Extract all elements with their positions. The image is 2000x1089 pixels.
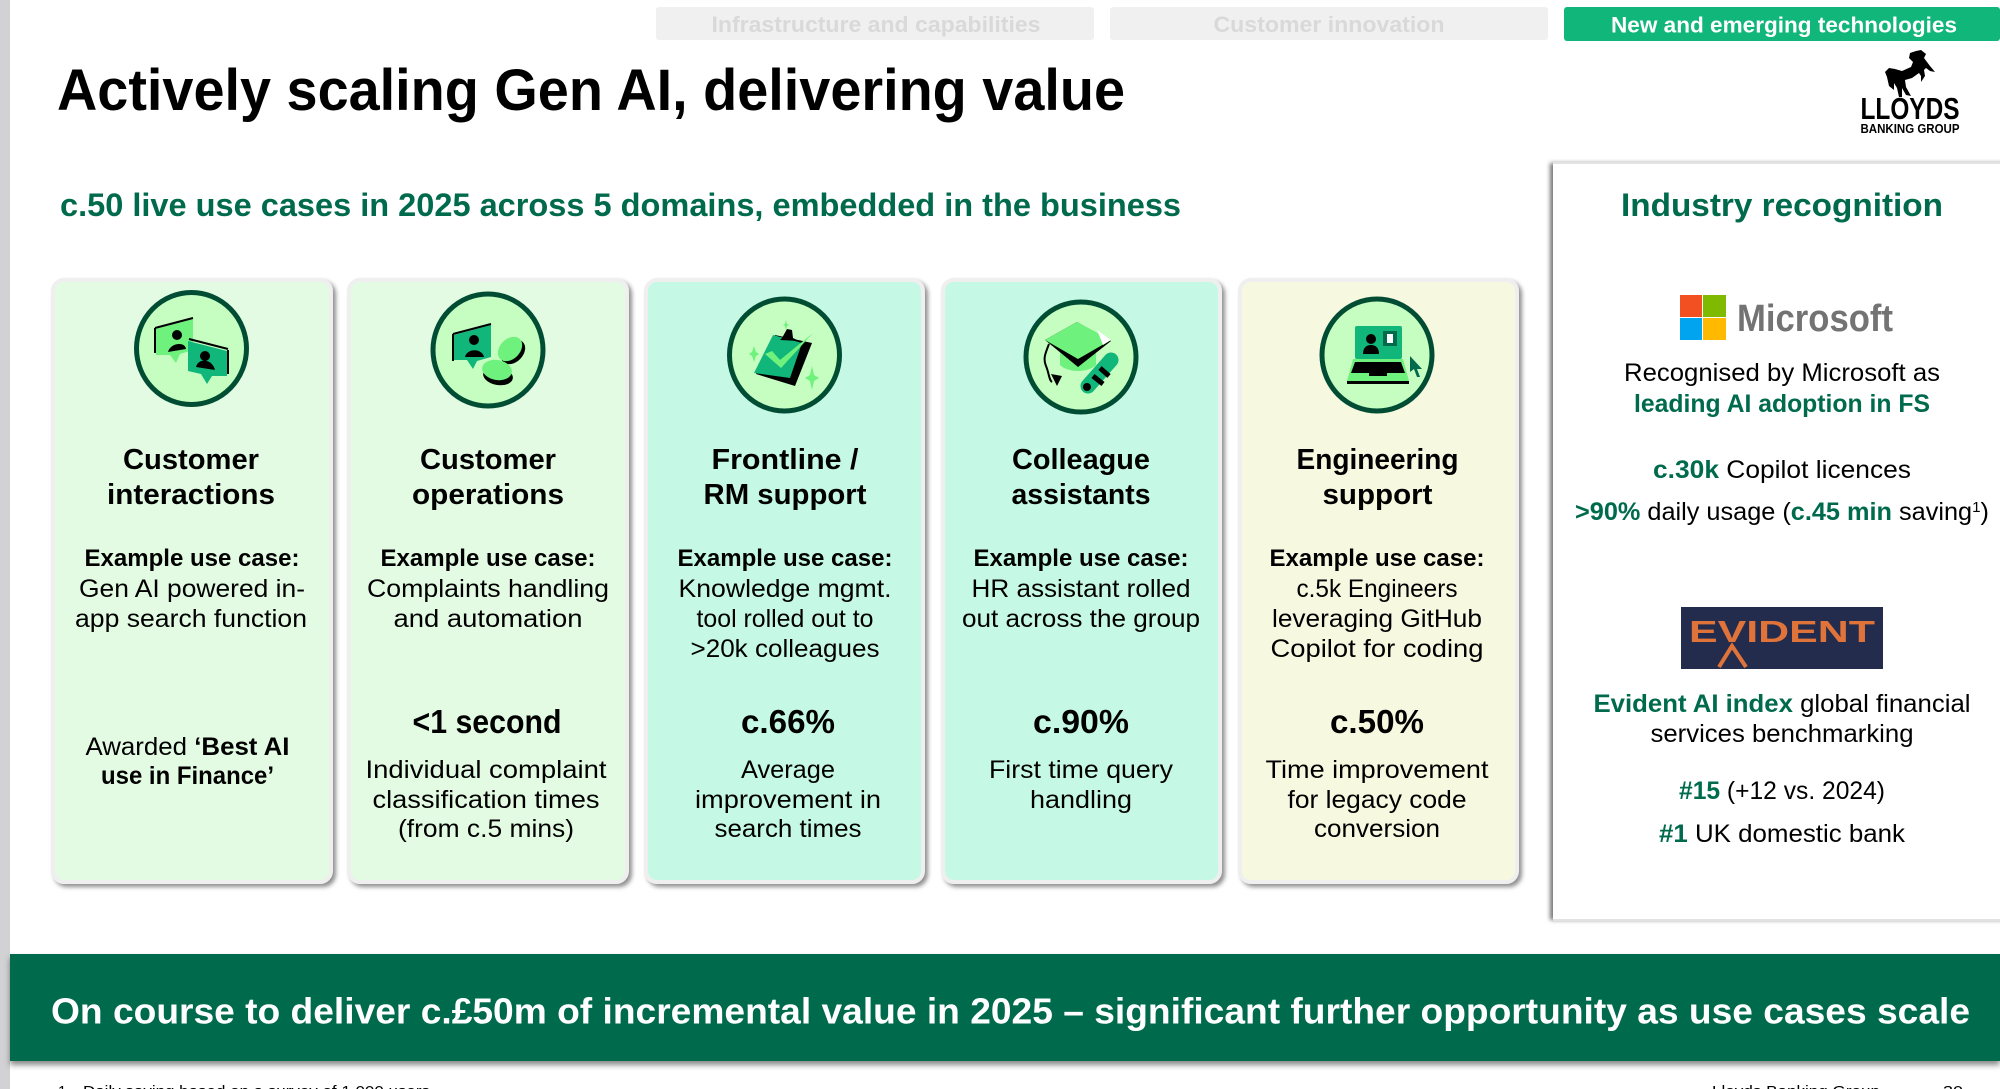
text: Copilot stats: >90% daily usage (c.45 min saving: [1575, 498, 1971, 526]
example use case: Example use case:: [380, 545, 596, 572]
text: Microsoft recognition: leading AI adoption in FS: [1634, 390, 1930, 418]
banner: [10, 954, 2000, 1061]
subheading: c.50 live use cases in 2025 across 5 domains, embedded in the business: [60, 187, 1181, 223]
example use case: Copilot for coding: [1270, 635, 1484, 663]
text: rankings: #1 UK domestic bank: [1659, 820, 1906, 848]
text: Copilot stats: 1: [1972, 499, 1981, 516]
metric: <1 second: [412, 703, 562, 740]
heading: Customer: [123, 444, 259, 476]
example use case: app search function: [75, 605, 307, 633]
heading: assistants: [1012, 479, 1150, 511]
example use case: Example use case:: [678, 545, 892, 572]
example use case: Knowledge mgmt.: [678, 575, 892, 603]
tab: Infrastructure and capabilities: [656, 7, 1094, 40]
icon: laptop and video call: [1322, 299, 1432, 411]
example use case: c.5k Engineers: [1296, 575, 1458, 603]
example use case: and automation: [394, 605, 582, 633]
logo: Lloyds Banking Group: BANKING GROUP: [1860, 122, 1960, 136]
example use case: [962, 545, 1200, 633]
panel: engineering support: [1240, 280, 1517, 882]
example use case: Complaints handling: [367, 575, 609, 603]
metric: c.66%: [741, 703, 835, 740]
logo: Lloyds Banking Group: [1860, 50, 1960, 136]
text: Microsoft recognition: [1624, 359, 1940, 418]
metric: conversion: [1314, 815, 1440, 843]
heading: [107, 444, 275, 511]
icon: clipboard: [730, 299, 840, 411]
tab: New and emerging technologies: New and emerging technologies: [1611, 12, 1957, 38]
metric: search times: [714, 815, 862, 843]
logo: Evident: EVIDENT: [1689, 614, 1875, 649]
tab: Customer innovation: [1110, 7, 1548, 40]
icon: chat and coins: [433, 294, 543, 406]
metric: handling: [1030, 786, 1132, 814]
tab: New and emerging technologies: [1564, 7, 2000, 41]
metric: Average: [741, 756, 835, 784]
heading: Industry recognition: [1621, 187, 1943, 223]
metric: [989, 703, 1174, 814]
metric: c.50%: [1330, 703, 1424, 740]
award: use in Finance’: [101, 762, 274, 790]
example use case: Example use case:: [1270, 545, 1484, 572]
icon: chat bubbles: [136, 292, 246, 404]
metric: [366, 703, 607, 843]
text: Evident index: services benchmarking: [1650, 720, 1914, 748]
title: Actively scaling Gen AI, delivering value: [57, 58, 1125, 123]
metric: c.90%: [1033, 703, 1129, 740]
text: Copilot stats: c.30k Copilot licences: [1653, 456, 1911, 484]
text: Copilot stats: [1575, 456, 1989, 526]
heading: support: [1322, 479, 1433, 511]
text: Evident index: Evident AI index global financial: [1594, 690, 1970, 718]
example use case: Gen AI powered in-: [79, 575, 305, 603]
heading: interactions: [107, 479, 275, 511]
example use case: out across the group: [962, 605, 1200, 633]
text: Microsoft recognition: Recognised by Microsoft as: [1624, 359, 1940, 387]
heading: [704, 444, 867, 511]
example use case: Example use case:: [974, 545, 1188, 572]
panel: frontline / RM support: [646, 280, 923, 882]
example use case: [678, 545, 892, 663]
metric: Individual complaint: [366, 756, 607, 784]
text: Evident index: [1594, 690, 1970, 748]
metric: classification times: [372, 786, 600, 814]
icon: black horse: [1885, 50, 1935, 97]
heading: [1296, 444, 1458, 511]
metric: (from c.5 mins): [398, 815, 574, 843]
metric: [695, 703, 881, 843]
banner: On course to deliver c.£50m of incremental value in 2025 – significant further opportunity as use cases scale: [51, 990, 1970, 1032]
example use case: HR assistant rolled: [972, 575, 1190, 603]
example use case: >20k colleagues: [690, 635, 880, 663]
logo: Lloyds Banking Group: LLOYDS: [1860, 91, 1960, 126]
heading: Engineering: [1296, 444, 1458, 476]
panel: colleague assistants: [943, 280, 1220, 882]
logo: Microsoft: Microsoft: [1737, 298, 1893, 340]
panel: industry recognition: [1553, 162, 2000, 921]
panel: customer interactions: [53, 280, 331, 882]
example use case: leveraging GitHub: [1272, 605, 1482, 633]
heading: [412, 444, 564, 511]
metric: [1266, 703, 1489, 843]
text: rankings: #15 (+12 vs. 2024): [1679, 777, 1885, 805]
example use case: [367, 545, 609, 633]
panel: customer operations: [349, 280, 627, 882]
heading: operations: [412, 479, 564, 511]
heading: Frontline /: [712, 444, 858, 476]
logo: Microsoft: [1680, 295, 1893, 340]
icon: graduation cap: [1026, 302, 1136, 412]
heading: Colleague: [1012, 444, 1150, 476]
metric: for legacy code: [1288, 786, 1466, 814]
text: rankings: [1659, 777, 1906, 848]
metric: improvement in: [695, 786, 881, 814]
award: Awarded ‘Best AI: [86, 733, 290, 761]
tab: Infrastructure and capabilities: Infrastructure and capabilities: [712, 12, 1040, 37]
example use case: Example use case:: [84, 545, 300, 572]
metric: Time improvement: [1266, 756, 1489, 784]
footer: company and page number: [1712, 1083, 1963, 1089]
example use case: [1270, 545, 1484, 663]
metric: First time query: [989, 756, 1174, 784]
award: [86, 733, 290, 790]
heading: Customer: [420, 444, 556, 476]
text: Copilot stats: ): [1981, 498, 1989, 526]
example use case: tool rolled out to: [696, 605, 874, 633]
heading: [1012, 444, 1150, 511]
tab: Customer innovation: Customer innovation: [1214, 12, 1444, 37]
heading: RM support: [704, 479, 867, 511]
logo: Evident: [1681, 607, 1883, 669]
example use case: [75, 545, 307, 633]
